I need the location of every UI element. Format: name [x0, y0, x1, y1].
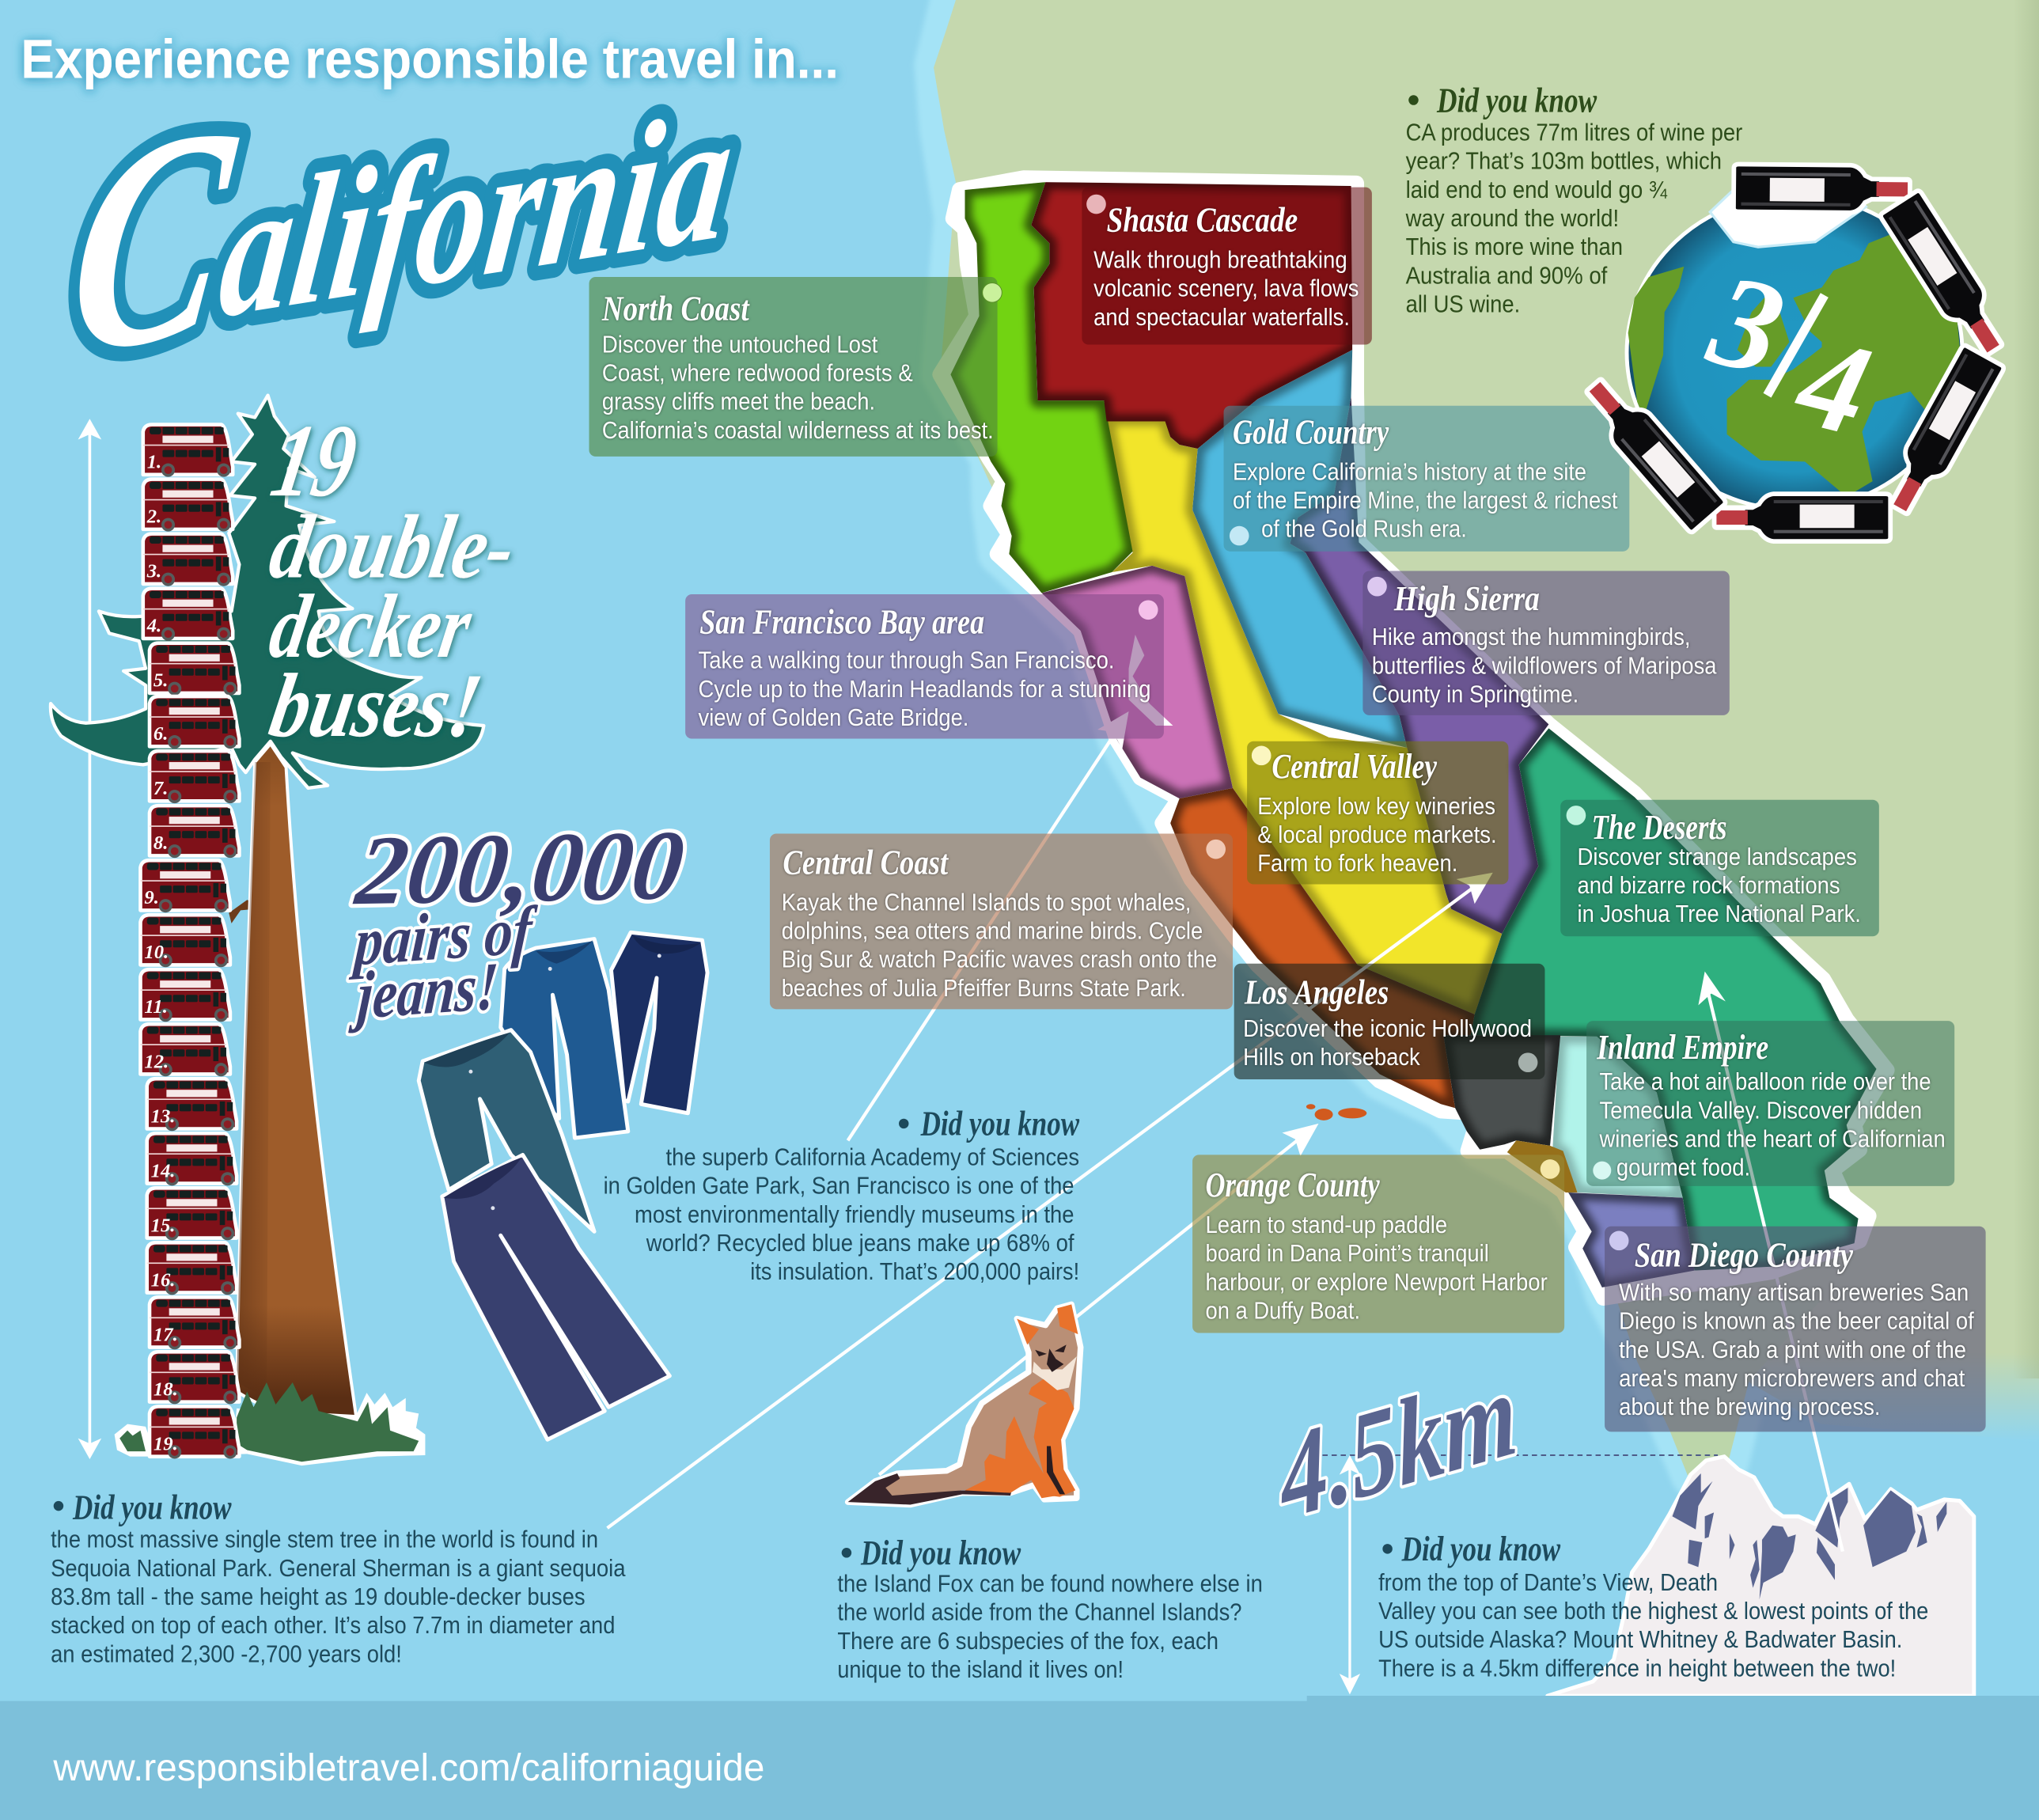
region: The Deserts (teal green) [1471, 728, 1877, 1271]
tree branch [229, 900, 255, 923]
headline: 19 double-decker buses: double- [263, 497, 522, 597]
bus 17: 17. [153, 1324, 178, 1345]
heading: Los Angeles [1244, 973, 1389, 1012]
heading: Did you know [72, 1488, 232, 1527]
bus 19 [150, 1406, 239, 1458]
panel: San Francisco Bay area [685, 594, 1164, 738]
panel background [1082, 188, 1372, 345]
bus 18 [150, 1352, 239, 1404]
land: Baja peninsula [1613, 1287, 1821, 1483]
panel: High Sierra [1362, 571, 1730, 715]
body text: Hills on horseback [1243, 1044, 1420, 1071]
body text [602, 331, 994, 444]
body text: Big Sur & watch Pacific waves crash onto the [782, 946, 1217, 973]
marker dot [1139, 600, 1158, 620]
bus 5 [150, 643, 239, 696]
bus 15: 15. [151, 1215, 175, 1236]
bus 8: 8. [153, 832, 168, 854]
headline: 19 double-decker buses: decker [263, 577, 479, 677]
region: Gold Country (blue) [1192, 350, 1407, 748]
icon: globe ringed with wine bottles [1579, 166, 2011, 539]
body text: There is a 4.5km difference in height between the two! [1378, 1655, 1896, 1682]
jeans: indigo [442, 1155, 669, 1439]
body text [837, 1571, 1263, 1683]
body text: gourmet food. [1616, 1155, 1750, 1181]
body text: way around the world! [1405, 205, 1619, 232]
bottle: top [1736, 166, 1908, 210]
headline: 19 double-decker buses: buses! [263, 656, 489, 756]
body text: Cycle up to the Marin Headlands for a stunning [699, 676, 1150, 703]
body text: view of Golden Gate Bridge. [699, 704, 968, 731]
body text: beaches of Julia Pfeiffer Burns State Park. [782, 975, 1186, 1002]
arrow: mountains to The Deserts [1698, 972, 1843, 1552]
body text: world? Recycled blue jeans make up 68% of [646, 1230, 1074, 1257]
body text: wineries and the heart of Californian [1599, 1126, 1946, 1153]
headline: 200,000 pairs of jeans: 200,000 [350, 810, 689, 926]
body text: Take a hot air balloon ride over the [1599, 1068, 1931, 1095]
heading: Did you know [920, 1104, 1079, 1143]
land: neighbouring states [934, 0, 2039, 1441]
panel background [589, 277, 998, 457]
panel background [1247, 741, 1508, 885]
body text: Take a walking tour through San Francisco. [699, 647, 1114, 674]
jeans: blue [501, 939, 628, 1138]
grass [115, 1382, 425, 1465]
body text: in Golden Gate Park, San Francisco is one of the [604, 1173, 1074, 1200]
footer band [0, 1696, 2039, 1820]
body text: an estimated 2,300 -2,700 years old! [51, 1640, 402, 1667]
body text: in Joshua Tree National Park. [1578, 901, 1861, 927]
bus 3: 3. [146, 561, 161, 582]
jeans: navy [611, 932, 707, 1113]
fox leg shadow [1047, 1447, 1065, 1494]
bus 5: 5. [153, 670, 168, 692]
region: San Diego County (indigo) [1568, 1192, 1694, 1287]
body text [1599, 1068, 1946, 1181]
heading: Did you know [1436, 80, 1597, 119]
body text: area's many microbrewers and chat [1619, 1365, 1965, 1392]
map: white state outline [940, 178, 1887, 1298]
body text: Explore California’s history at the site [1233, 458, 1586, 485]
bus 4: 4. [146, 616, 161, 637]
bus 15 [147, 1188, 237, 1240]
body text: volcanic scenery, lava flows [1093, 275, 1359, 302]
fox ears [1017, 1304, 1078, 1344]
tree foliage [51, 396, 483, 788]
headline: 4.5km: 4.5km [1272, 1344, 1522, 1545]
trunk shading [237, 762, 271, 1398]
fox eyes [1035, 1344, 1067, 1356]
body text: butterflies & wildflowers of Mariposa [1372, 652, 1716, 679]
arrow: sequoia to Central Valley [608, 873, 1493, 1528]
globe [1627, 195, 1962, 510]
panel: San Diego County [1605, 1227, 1986, 1431]
snowy mountain [1548, 1457, 1974, 1696]
body text: and bizarre rock formations [1578, 872, 1840, 899]
heading: San Francisco Bay area [699, 601, 984, 641]
bullet [899, 1119, 908, 1128]
bullet [1382, 1544, 1393, 1554]
stack of 19 double-decker buses [140, 425, 239, 1458]
bus 2 [143, 480, 233, 532]
body text: Farm to fork heaven. [1257, 850, 1457, 877]
did you know: island fox [837, 1533, 1263, 1683]
body text: unique to the island it lives on! [837, 1656, 1124, 1683]
body text: laid end to end would go ¾ [1406, 176, 1667, 203]
body text: board in Dana Point’s tranquil [1206, 1240, 1489, 1267]
globe: large continent [1727, 233, 1961, 497]
bus 10: 10. [144, 942, 169, 963]
globe: small island [1738, 290, 1789, 366]
marker dot [1367, 577, 1387, 597]
bottle: upper right [1882, 192, 2011, 360]
map of California [940, 178, 1887, 1298]
panel background [1560, 800, 1879, 936]
region: Orange County (brown) [1507, 1140, 1578, 1192]
body text [1257, 793, 1497, 877]
body text: most environmentally friendly museums in the [635, 1201, 1074, 1228]
bus 11 [140, 969, 230, 1022]
fox silhouette [848, 1304, 1081, 1504]
headline: 19 double-decker buses: 19 [263, 403, 365, 518]
illustration: island fox [848, 1304, 1081, 1504]
bus 6: 6. [153, 723, 168, 745]
bus 6 [150, 696, 239, 749]
panel: Los Angeles [1234, 964, 1544, 1079]
panel background [1362, 571, 1730, 715]
body text [1372, 624, 1716, 707]
body text: year? That’s 103m bottles, which [1406, 148, 1722, 175]
bus 16 [147, 1242, 237, 1295]
body text: Discover the iconic Hollywood [1243, 1015, 1532, 1042]
land: right edge shading [2013, 0, 2039, 1378]
panel: Orange County [1192, 1155, 1564, 1333]
marker dot [1252, 746, 1272, 765]
body text: Walk through breathtaking [1093, 247, 1347, 274]
shallow water glow along the coast [934, 0, 2039, 1476]
bus 19: 19. [153, 1433, 178, 1454]
body text: about the brewing process. [1619, 1393, 1880, 1420]
body text: California’s coastal wilderness at its best. [602, 417, 994, 444]
body text: the Island Fox can be found nowhere else in [837, 1571, 1263, 1598]
bottle: bottom [1716, 496, 1888, 539]
body text: of the Gold Rush era. [1261, 516, 1467, 543]
region: Central Coast (orange) [1170, 788, 1475, 1108]
bus 16: 16. [151, 1269, 175, 1291]
body text: Valley you can see both the highest & lowest points of the [1378, 1598, 1928, 1625]
heading: Gold Country [1233, 411, 1389, 451]
heading: High Sierra [1393, 578, 1540, 618]
body text: the world aside from the Channel Islands? [837, 1599, 1242, 1626]
panel background [1234, 964, 1544, 1079]
bus 9 [140, 860, 230, 912]
marker dot [1593, 1162, 1611, 1180]
body text: harbour, or explore Newport Harbor [1206, 1268, 1548, 1295]
body text: This is more wine than [1406, 233, 1623, 260]
region: North Coast (green) [950, 182, 1132, 593]
did you know: California Academy of Sciences [604, 1104, 1079, 1285]
panel: The Deserts [1560, 800, 1879, 936]
tree height arrow [78, 419, 101, 1459]
body text: Kayak the Channel Islands to spot whales, [782, 889, 1191, 916]
bus 3 [143, 534, 233, 586]
region: High Sierra (purple) [1290, 396, 1548, 934]
heading: Inland Empire [1596, 1027, 1768, 1067]
body text [1619, 1279, 1974, 1420]
page title: Experience responsible travel in... [21, 28, 839, 90]
marker dot [1086, 195, 1106, 214]
headline: 19 double-decker buses [263, 403, 522, 756]
panel background [685, 594, 1164, 738]
body text [1578, 844, 1861, 927]
bus 7: 7. [153, 778, 168, 799]
headline: 200,000 pairs of jeans: jeans! [347, 947, 501, 1034]
panel background [1224, 406, 1629, 552]
bus 10 [140, 915, 230, 967]
bus 12 [140, 1024, 230, 1076]
fox orange haunch [965, 1416, 1057, 1498]
region: Inland Empire (aqua) [1552, 1037, 1683, 1198]
panel background [1192, 1155, 1564, 1333]
body text: County in Springtime. [1372, 681, 1579, 707]
globe: left continent [1628, 267, 1684, 418]
bullet [842, 1548, 851, 1558]
bus 11: 11. [144, 996, 168, 1018]
height dashed line [1304, 1454, 1718, 1456]
did you know: California wine [1405, 80, 1742, 317]
did you know: Death Valley [1378, 1529, 1928, 1682]
arrow: academy of sciences to the Bay area [848, 711, 1129, 1140]
bus 4 [143, 589, 233, 641]
did you know: General Sherman [51, 1488, 626, 1667]
body text: US outside Alaska? Mount Whitney & Badwater Basin. [1378, 1626, 1902, 1653]
bus 18: 18. [153, 1378, 178, 1400]
body text [604, 1144, 1079, 1285]
fox muzzle [1047, 1348, 1063, 1372]
region: Shasta Cascade (red) [1031, 182, 1352, 449]
heading: San Diego County [1635, 1235, 1853, 1275]
marker dot [1567, 806, 1586, 825]
heading: Did you know [1401, 1529, 1561, 1568]
fraction 3/4: 4 [1783, 308, 1883, 464]
bus 13 [147, 1079, 237, 1131]
marker dot [1518, 1052, 1537, 1072]
fraction 3/4 [1696, 245, 1883, 464]
heading: Central Coast [783, 842, 949, 882]
bus 2: 2. [146, 506, 161, 528]
panel: Inland Empire [1586, 1021, 1954, 1186]
California wordmark: C [55, 60, 252, 420]
body text [699, 647, 1150, 731]
bus 8 [150, 806, 239, 858]
heading: Central Valley [1272, 746, 1437, 786]
marker dot [1230, 526, 1249, 545]
illustration: pile of jeans [419, 932, 707, 1439]
body text [782, 889, 1217, 1002]
body text [1206, 1211, 1548, 1324]
body text: There are 6 subspecies of the fox, each [837, 1628, 1218, 1655]
heading: Orange County [1206, 1165, 1380, 1204]
body text: Diego is known as the beer capital of [1619, 1308, 1974, 1335]
bus 14: 14. [151, 1160, 175, 1181]
panel background [770, 833, 1233, 1009]
bus 14 [147, 1133, 237, 1185]
bottle: lower right [1881, 347, 2002, 518]
bus 12: 12. [144, 1051, 169, 1072]
bus 17 [150, 1297, 239, 1349]
grass blades [119, 1382, 419, 1462]
body text: stacked on top of each other. It’s also 7.7m in diameter and [51, 1612, 615, 1639]
body text: Hike amongst the hummingbirds, [1372, 624, 1691, 650]
body text: Explore low key wineries [1257, 793, 1495, 820]
height arrow [1340, 1455, 1360, 1694]
globe: ice cap [1710, 190, 1866, 247]
heading: Did you know [860, 1533, 1021, 1572]
bus 13: 13. [151, 1105, 175, 1127]
region: San Francisco Bay area (pink) [1041, 566, 1233, 798]
marker dot [1206, 840, 1226, 859]
bus 1 [143, 425, 233, 477]
region: Central Valley (yellow) [1107, 419, 1502, 1014]
footer url: www.responsibletravel.com/californiaguide [52, 1746, 764, 1789]
body text: its insulation. That’s 200,000 pairs! [750, 1258, 1079, 1285]
headline: 200,000 pairs of jeans [347, 810, 689, 1034]
bus 9: 9. [144, 887, 159, 908]
illustration: sequoia tree [51, 396, 483, 1465]
body text: With so many artisan breweries San [1619, 1279, 1969, 1306]
body text: CA produces 77m litres of wine per [1406, 119, 1742, 146]
body text: 83.8m tall - the same height as 19 double-decker buses [51, 1583, 586, 1610]
body text: Discover strange landscapes [1578, 844, 1857, 870]
arrow: island fox to Channel Islands [879, 1124, 1319, 1475]
body text: the superb California Academy of Sciences [665, 1144, 1079, 1171]
illustration: mountains [1548, 1457, 1974, 1696]
panel background [1605, 1227, 1986, 1431]
body text [51, 1526, 626, 1667]
body text: Temecula Valley. Discover hidden [1599, 1097, 1922, 1124]
bottle: lower left [1579, 373, 1723, 530]
body text: from the top of Dante’s View, Death [1378, 1569, 1718, 1596]
marker dot [983, 282, 1002, 302]
jeans: teal [419, 1030, 594, 1231]
rock faces [1673, 1473, 1946, 1599]
body text: Coast, where redwood forests & [602, 360, 913, 387]
grass outline [115, 1393, 425, 1465]
panel: Shasta Cascade [1082, 188, 1372, 345]
bullet [54, 1501, 63, 1511]
body text: Sequoia National Park. General Sherman is a giant sequoia [51, 1555, 626, 1582]
body text: grassy cliffs meet the beach. [602, 389, 875, 415]
bus 7 [150, 751, 239, 803]
fox orange chest and foreleg [1029, 1378, 1075, 1497]
marker dot [1541, 1159, 1560, 1179]
body text: Learn to stand-up paddle [1206, 1211, 1447, 1238]
body text: and spectacular waterfalls. [1093, 304, 1350, 331]
panel: North Coast [589, 277, 1002, 457]
marker dot [1609, 1231, 1628, 1250]
region: Los Angeles (charcoal) [1443, 1035, 1560, 1150]
region: San Francisco bay inlet [1129, 635, 1173, 726]
body text [1233, 458, 1618, 543]
heading: North Coast [601, 288, 750, 328]
fox throat [1033, 1356, 1077, 1390]
heading: Shasta Cascade [1107, 200, 1298, 240]
body text [1405, 119, 1742, 317]
body text: all US wine. [1406, 290, 1520, 317]
body text: dolphins, sea otters and marine birds. Cycle [782, 918, 1203, 945]
fraction 3/4: 3 [1696, 245, 1797, 404]
body text: the most massive single stem tree in the world is found in [51, 1526, 598, 1553]
Channel Islands [1306, 1104, 1366, 1120]
bullet [1408, 95, 1419, 105]
panel background [1586, 1021, 1954, 1186]
California wordmark: alifornia [210, 69, 743, 358]
heading: The Deserts [1592, 807, 1727, 847]
body text: the USA. Grab a pint with one of the [1619, 1337, 1966, 1363]
body text [1093, 247, 1359, 331]
bus 1: 1. [147, 452, 161, 473]
tree trunk [237, 744, 356, 1420]
panel: Gold Country [1224, 406, 1629, 552]
body text: Discover the untouched Lost [602, 331, 878, 358]
panel: Central Valley [1247, 741, 1508, 885]
body text: & local produce markets. [1257, 821, 1497, 848]
body text: of the Empire Mine, the largest & richest [1233, 487, 1618, 514]
panel: Central Coast [770, 833, 1233, 1009]
body text [1243, 1015, 1532, 1071]
body text [1378, 1569, 1928, 1682]
headline: 200,000 pairs of jeans: pairs of [348, 891, 540, 980]
body text: Australia and 90% of [1406, 262, 1608, 289]
fox tail tip and underside [848, 1473, 1012, 1504]
body text: on a Duffy Boat. [1206, 1297, 1360, 1324]
